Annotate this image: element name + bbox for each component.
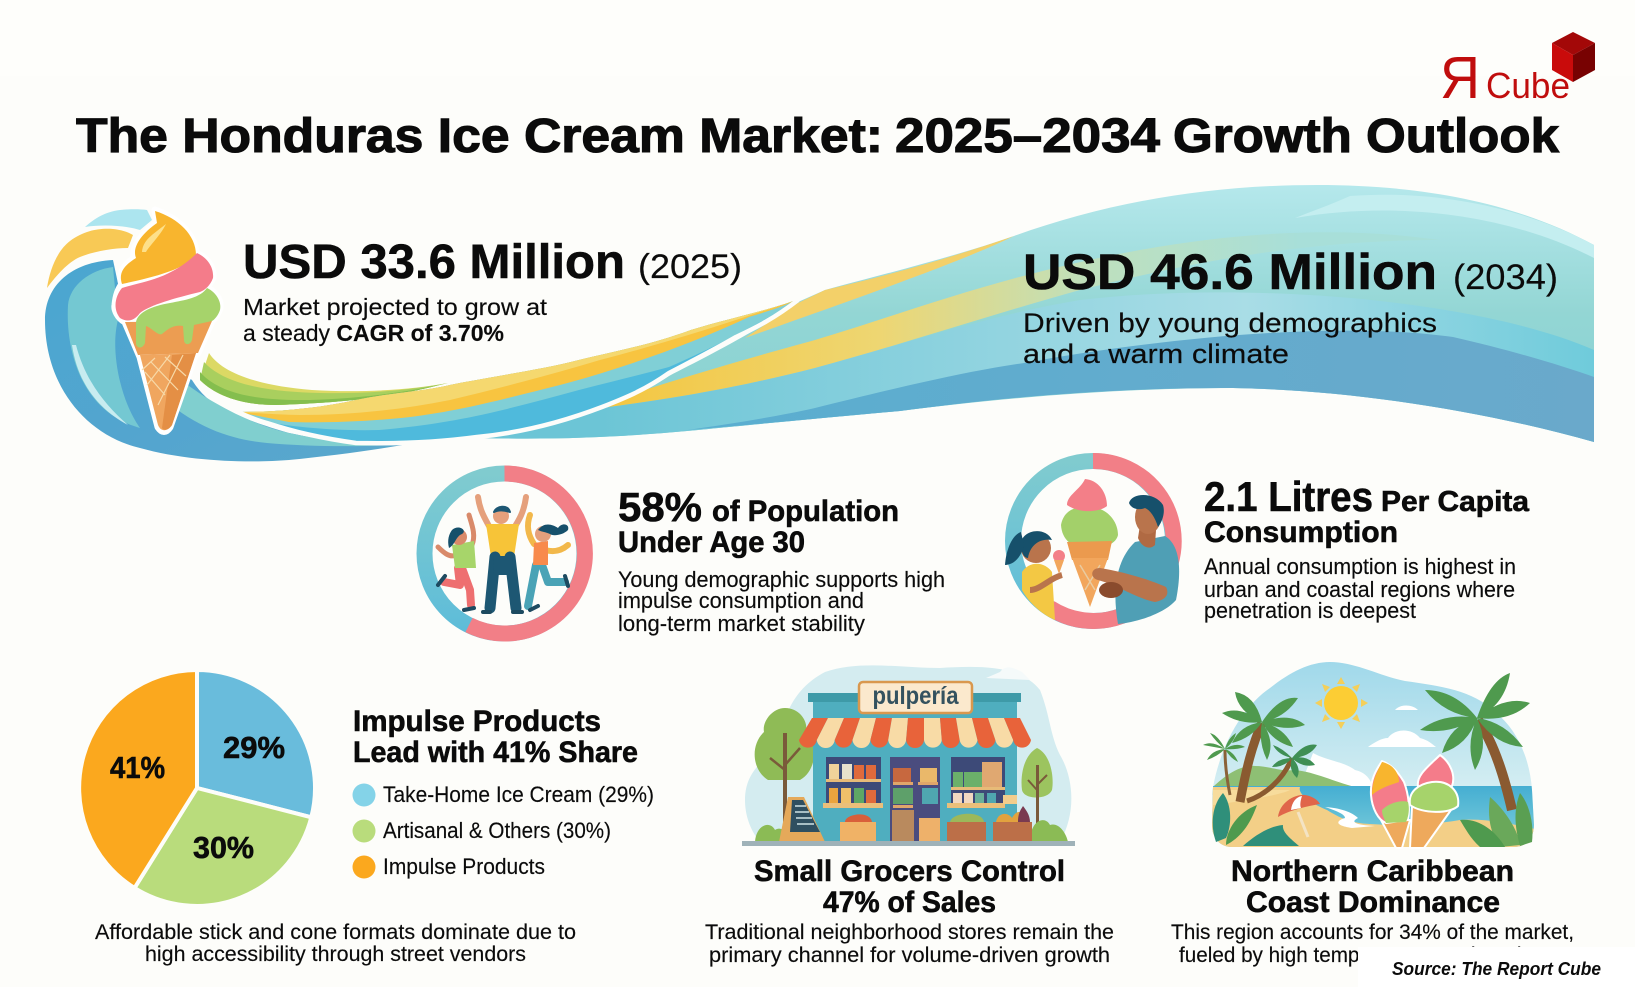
title: Growth Outlook (1173, 110, 1559, 163)
stat: USD 33.6 million: Market projected to grow at (243, 294, 548, 320)
umbrella (1278, 795, 1320, 837)
legend (352, 782, 654, 879)
light blue crest (85, 209, 152, 230)
right window (947, 757, 1005, 808)
body text: Affordable stick and cone formats dominate due to (95, 920, 576, 944)
heading: Coast Dominance (1246, 886, 1500, 919)
door (890, 757, 940, 842)
right swoosh base (477, 185, 1594, 442)
cone outline (115, 210, 220, 432)
heading (353, 705, 638, 769)
title: The Honduras Ice Cream Market: (76, 110, 883, 163)
yellow crest (47, 229, 133, 288)
heading: Lead with 41% Share (353, 736, 638, 769)
right palm tree (1420, 673, 1530, 810)
heading: Under Age 30 (618, 526, 805, 559)
legend: Artisanal & Others (30%) (383, 818, 611, 843)
source box: Source: The Report Cube (1392, 959, 1601, 979)
body text (618, 567, 945, 636)
small cones (1371, 755, 1458, 848)
chalkboard (779, 797, 825, 842)
body text (705, 920, 1114, 967)
right tree (1022, 748, 1053, 843)
ground line (742, 841, 1075, 846)
legend: Take-Home Ice Cream (29%) (383, 782, 654, 807)
body text: primary channel for volume-driven growth (709, 943, 1110, 967)
stat: USD 46.6 million: USD 46.6 Million (1023, 244, 1437, 300)
sky sea and sand (1205, 660, 1540, 850)
wave tail teal (165, 370, 408, 446)
icon: family with ice cream (1005, 479, 1179, 624)
yellow scoop (121, 211, 196, 284)
middle yellow band (602, 232, 1440, 408)
body text: long-term market stability (618, 611, 865, 636)
foliage (1213, 793, 1532, 847)
left window (823, 757, 883, 808)
heading: of Population (712, 495, 899, 528)
left tree (755, 708, 814, 843)
body text: Annual consumption is highest in (1204, 554, 1516, 579)
upper yellow wedge (745, 236, 1014, 338)
title: 2025–2034 (895, 110, 1160, 163)
logo: RCube: Cube (1486, 65, 1570, 106)
body text: Traditional neighborhood stores remain the (705, 920, 1114, 944)
body text: urban and coastal regions where (1204, 577, 1515, 602)
pie labels: 30% (193, 830, 254, 865)
heading: Small Grocers Control (754, 855, 1065, 888)
lower cyan band (477, 292, 1594, 442)
panel: per capita consumption (1005, 461, 1530, 624)
stat: USD 33.6 million: a steady CAGR of 3.70% (243, 320, 504, 346)
stat: USD 33.6 million: USD 33.6 Million (243, 236, 625, 289)
logo: RCube: Я (1440, 45, 1480, 111)
body text: impulse consumption and (618, 588, 864, 613)
icon: dancing people (438, 497, 568, 612)
panel: small grocers (705, 665, 1114, 967)
stat: USD 33.6 million: (2025) (638, 248, 742, 286)
legend: Impulse Products (383, 854, 545, 879)
heading: 58% (618, 484, 702, 530)
heading (1204, 473, 1530, 549)
left large wave (45, 260, 408, 461)
body text (1204, 554, 1516, 623)
waffle cone (125, 321, 212, 430)
body text (1171, 920, 1574, 967)
stat: USD 46.6 million: and a warm climate (1023, 339, 1289, 369)
panel: northern caribbean coast (1171, 660, 1574, 967)
body text (95, 920, 576, 966)
donut ring (1013, 461, 1174, 621)
heading: 2.1 Litres (1204, 473, 1373, 520)
body text: fueled by high temperatures and tourism (1179, 943, 1549, 967)
green scoop (136, 288, 220, 348)
panel: population (424, 473, 945, 636)
body text: This region accounts for 34% of the market, (1171, 920, 1574, 944)
stat: USD 33.6 million (243, 236, 742, 346)
stat: USD 46.6 million: Driven by young demographics (1023, 308, 1437, 338)
icon: beach scene (1203, 660, 1540, 850)
heading: Impulse Products (353, 705, 601, 738)
wave inner teal (68, 267, 140, 428)
bushes (755, 820, 1068, 842)
icon: ice cream cone (115, 210, 220, 432)
light crest (1295, 195, 1594, 258)
green tail (200, 353, 448, 405)
donut ring 58 percent (424, 473, 585, 634)
crates and produce (840, 795, 1032, 842)
pie chart (79, 670, 315, 906)
heading: 47% of Sales (823, 886, 996, 919)
left palm trees (1203, 692, 1317, 802)
heading (618, 484, 899, 559)
icon: pulperia store (742, 665, 1075, 846)
pie labels: 41% (110, 750, 165, 785)
body text: Young demographic supports high (618, 567, 945, 592)
heading (1231, 855, 1514, 919)
swoosh: growth wave (45, 185, 1594, 461)
body text: penetration is deepest (1204, 598, 1416, 623)
stat: USD 46.6 million (1023, 244, 1558, 369)
panel: product share (79, 670, 654, 966)
heading: Northern Caribbean (1231, 855, 1514, 888)
building (813, 700, 1017, 843)
white ribbon line (195, 300, 798, 443)
body text: high accessibility through street vendors (145, 942, 526, 966)
source box (1358, 947, 1635, 995)
sun (1315, 677, 1368, 729)
wave highlight (72, 345, 128, 425)
heading: Per Capita (1381, 486, 1530, 518)
sign: pulpería (872, 682, 959, 710)
pie labels (110, 730, 285, 865)
stat: USD 46.6 million: (2034) (1453, 258, 1558, 297)
title (76, 110, 1559, 163)
logo: RCube (1440, 32, 1595, 111)
lower blue band (687, 331, 1594, 442)
pink scoop (116, 253, 213, 320)
heading (754, 855, 1065, 919)
heading: Consumption (1204, 516, 1398, 549)
pie labels: 29% (223, 730, 285, 765)
awning (799, 718, 1031, 748)
main ribbon (238, 300, 796, 443)
